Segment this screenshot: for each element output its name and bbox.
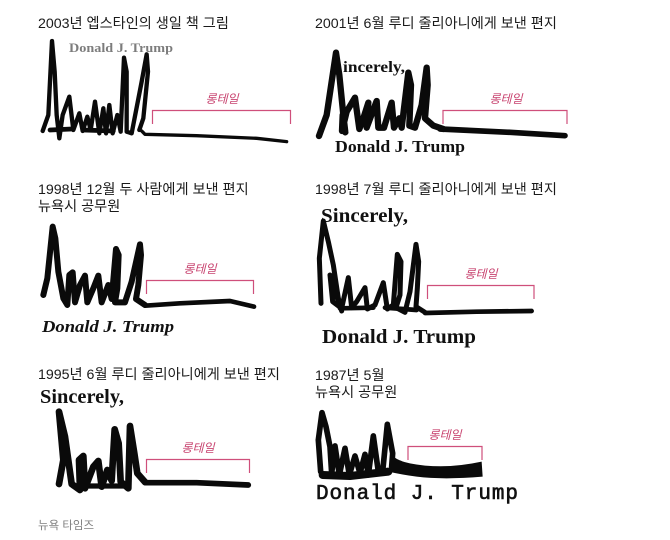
printed closing: Sincerely, <box>40 386 124 408</box>
long tail bracket <box>152 92 290 124</box>
bracket label: 롱테일 <box>181 441 216 455</box>
long tail bracket <box>408 428 482 460</box>
heading: 1998년 7월 루디 줄리아니에게 보낸 편지 <box>315 182 557 198</box>
printed name: Donald J. Trump <box>322 326 476 348</box>
printed name: Donald J. Trump <box>41 317 174 336</box>
bracket label: 롱테일 <box>489 92 524 106</box>
printed name: Donald J. Trump <box>335 137 465 156</box>
signature <box>319 221 532 313</box>
printed closing: Sincerely, <box>321 205 408 227</box>
printed name: Donald J. Trump <box>316 483 518 506</box>
long tail bracket <box>428 267 534 299</box>
panel: 1987 signature <box>315 368 518 506</box>
bracket label: 롱테일 <box>428 428 463 442</box>
heading: 1998년 12월 두 사람에게 보낸 편지 <box>38 182 249 198</box>
sub heading: 뉴욕시 공무원 <box>315 385 397 401</box>
printed name: Donald J. Trump <box>69 41 173 55</box>
panel: 2003 signature <box>38 16 290 142</box>
heading: 1987년 5월 <box>315 368 384 384</box>
heading: 2001년 6월 루디 줄리아니에게 보낸 편지 <box>315 16 557 32</box>
source credit: 뉴욕 타임즈 <box>38 519 94 532</box>
printed closing: incerely, <box>343 59 405 76</box>
signature <box>319 53 565 136</box>
signature <box>43 41 287 142</box>
bracket label: 롱테일 <box>183 262 218 276</box>
signature <box>43 227 254 307</box>
panel: July 1998 signature <box>315 182 557 348</box>
heading: 1995년 6월 루디 줄리아니에게 보낸 편지 <box>38 367 280 383</box>
long tail bracket <box>443 92 567 124</box>
long tail bracket <box>146 262 254 294</box>
signature <box>318 413 483 478</box>
panel: December 1998 signature <box>38 182 254 336</box>
sub heading: 뉴욕시 공무원 <box>38 199 120 215</box>
panel: 1995 signature <box>38 367 280 490</box>
signature <box>59 412 248 490</box>
panel: 2001 signature <box>315 16 567 156</box>
long tail bracket <box>146 441 250 473</box>
bracket label: 롱테일 <box>464 267 499 281</box>
heading: 2003년 엡스타인의 생일 책 그림 <box>38 16 229 32</box>
bracket label: 롱테일 <box>205 92 240 106</box>
